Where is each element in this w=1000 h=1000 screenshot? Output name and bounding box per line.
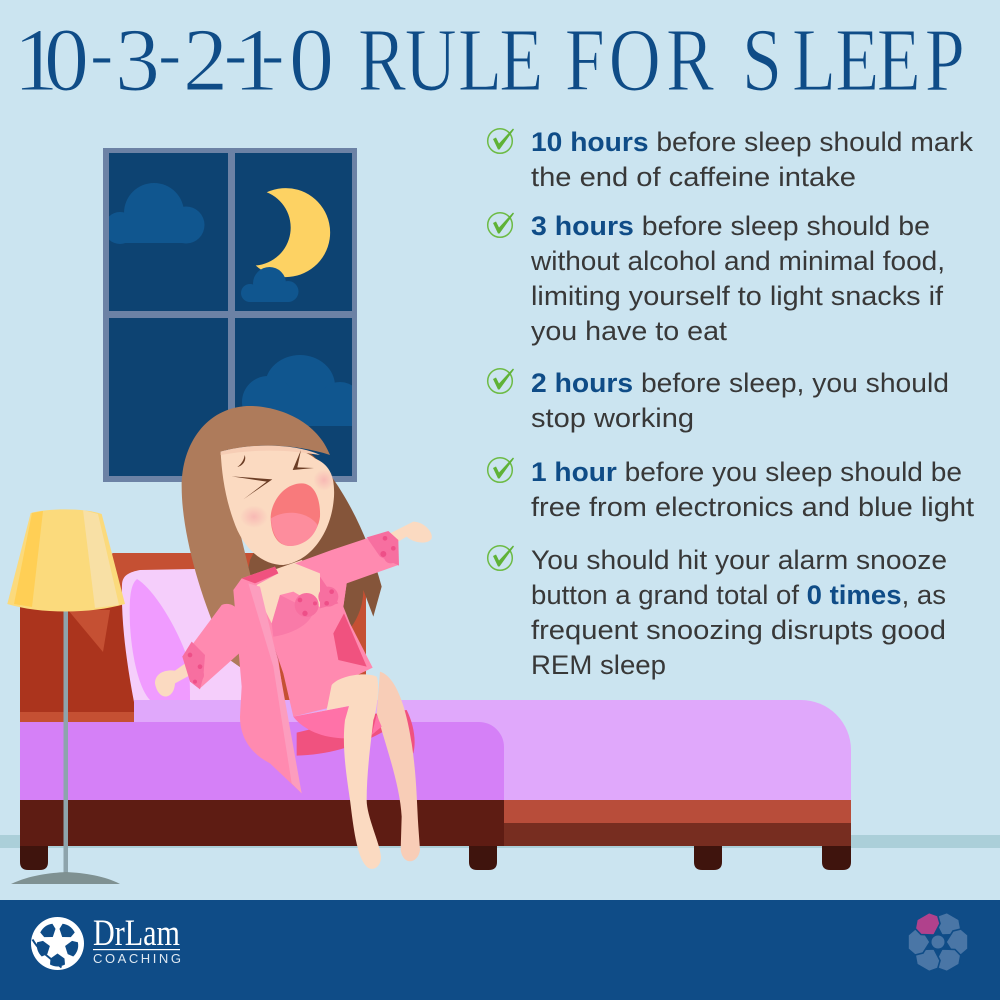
bed base (20, 800, 504, 846)
mattress front (20, 722, 504, 800)
chest skin (253, 560, 321, 623)
title: - (90, 16, 113, 93)
item: 0 times: frequent snoozing disrupts good (531, 615, 946, 645)
item: 2 hours: 2 hours before sleep, you should (531, 368, 949, 398)
headboard (20, 553, 366, 775)
logo: DrLam Coaching (31, 913, 181, 970)
left hand (155, 660, 193, 696)
robe trim (248, 583, 302, 793)
logo wordmark: DrLam (93, 913, 180, 954)
item: 0 times (488, 545, 947, 680)
left arm robe (183, 604, 247, 688)
back leg (297, 672, 420, 861)
title: 1 (234, 11, 278, 110)
title: 2 (183, 11, 228, 110)
item: 3 hours: limiting yourself to light snacks if (531, 281, 944, 311)
left cheek blush (240, 505, 268, 528)
title: RULE (358, 9, 543, 110)
item: 10 hours (488, 127, 974, 192)
item: 0 times: You should hit your alarm snooze (531, 545, 947, 575)
item: 2 hours (488, 368, 949, 433)
bed legs (20, 846, 851, 870)
hair front (182, 406, 330, 672)
icon: cloud lower right (242, 355, 352, 426)
tongue (271, 513, 318, 546)
title: - (261, 16, 284, 93)
skirt inner (293, 706, 349, 738)
robe inner lining (333, 613, 367, 667)
item: 3 hours: you have to eat (531, 316, 728, 346)
pillow (122, 568, 250, 702)
window (103, 148, 362, 482)
checklist (488, 127, 975, 680)
icon: crescent moon (256, 188, 330, 277)
title: 1 (14, 11, 58, 110)
right arm robe (295, 538, 398, 607)
floor lamp (7, 509, 125, 884)
open mouth (271, 483, 320, 546)
item: 1 hour: 1 hour before you sleep should be (531, 457, 962, 487)
title: 0 (289, 11, 334, 110)
closed eyes (232, 450, 314, 499)
title: - (224, 16, 247, 93)
icon: logo flower (31, 917, 84, 970)
floor line (0, 835, 1000, 848)
title: 3 (115, 11, 160, 110)
girl yawning (155, 406, 432, 869)
icon: cloud upper left (104, 183, 204, 244)
item: 0 times: button a grand total of 0 times, as (531, 580, 946, 610)
right hand (390, 522, 432, 543)
robe left panel (233, 567, 302, 793)
title: - (158, 16, 181, 93)
icon: flower emblem (908, 910, 968, 974)
item: 1 hour (488, 457, 975, 522)
item: 3 hours: without alcohol and minimal food, (530, 246, 945, 276)
item: 10 hours: the end of caffeine intake (531, 162, 856, 192)
item: 1 hour: free from electronics and blue light (531, 492, 975, 522)
right cheek blush (313, 469, 335, 491)
item: 3 hours: 3 hours before sleep should be (531, 211, 930, 241)
face (221, 446, 334, 565)
title: SLEEP (742, 9, 965, 110)
fringe shadow (221, 446, 320, 455)
title: 0 (44, 11, 89, 110)
footer band (0, 900, 1000, 1000)
icon: small cloud (241, 267, 298, 302)
title (14, 9, 965, 110)
item: 10 hours: 10 hours before sleep should mark (531, 127, 974, 157)
logo subtitle: COACHING (93, 951, 181, 966)
hair back (230, 450, 382, 672)
item: 0 times: REM sleep (531, 650, 666, 680)
nightdress and torso (253, 568, 373, 717)
chest lace (295, 577, 338, 617)
bed (20, 553, 851, 870)
title: FOR (565, 9, 715, 110)
item: 3 hours (488, 211, 945, 346)
left cuff lace (182, 642, 205, 689)
right cuff lace (367, 531, 399, 566)
front leg (293, 674, 381, 869)
collar (242, 567, 278, 583)
bust (272, 595, 313, 637)
item: 2 hours: stop working (531, 403, 694, 433)
mattress back (134, 700, 851, 800)
